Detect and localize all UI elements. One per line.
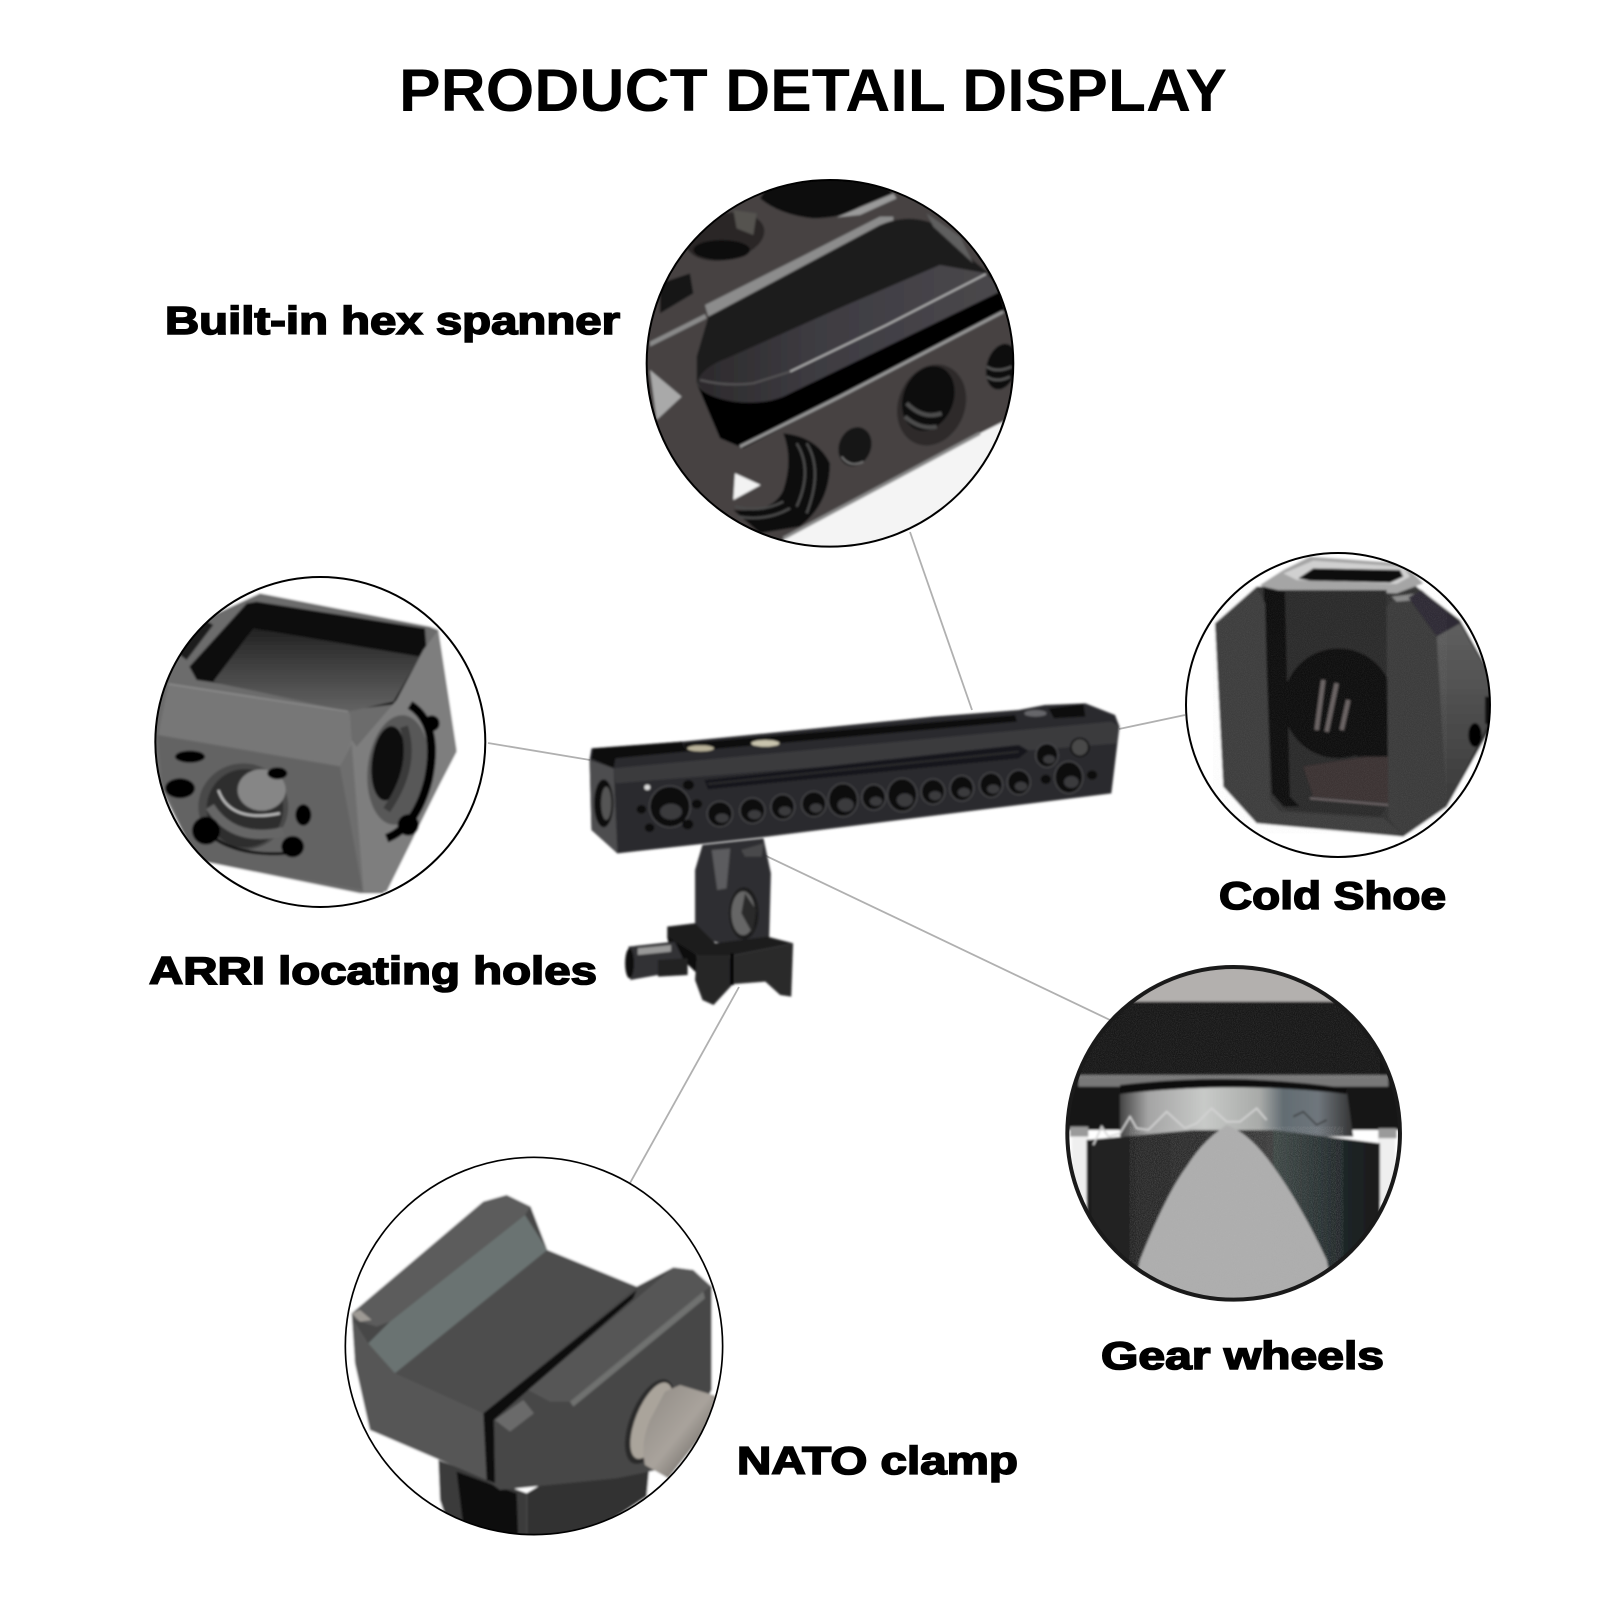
label: gear wheels: Gear wheels — [1101, 1335, 1384, 1378]
panel: built-in hex spanner detail circle — [646, 179, 1014, 548]
title: PRODUCT DETAIL DISPLAY — [399, 57, 1227, 124]
handle body — [590, 703, 1119, 853]
panel: cold shoe detail circle — [1185, 552, 1491, 858]
label: built-in hex spanner: Built-in hex spanner — [165, 300, 620, 343]
panel: ARRI locating holes detail circle — [154, 576, 486, 908]
label: ARRI locating holes: ARRI locating holes — [149, 950, 597, 993]
panel: NATO clamp detail circle — [344, 1156, 724, 1536]
NATO clamp — [625, 923, 793, 1005]
mount post — [695, 838, 771, 947]
main product photo: top handle — [590, 703, 1119, 1005]
panel: gear wheels detail circle — [1065, 965, 1402, 1302]
label: NATO clamp: NATO clamp — [737, 1440, 1018, 1483]
label: cold shoe: Cold Shoe — [1219, 875, 1446, 918]
clamp base silhouette — [352, 1195, 712, 1490]
connector lines — [488, 532, 1185, 1183]
handle holes — [650, 743, 1083, 827]
